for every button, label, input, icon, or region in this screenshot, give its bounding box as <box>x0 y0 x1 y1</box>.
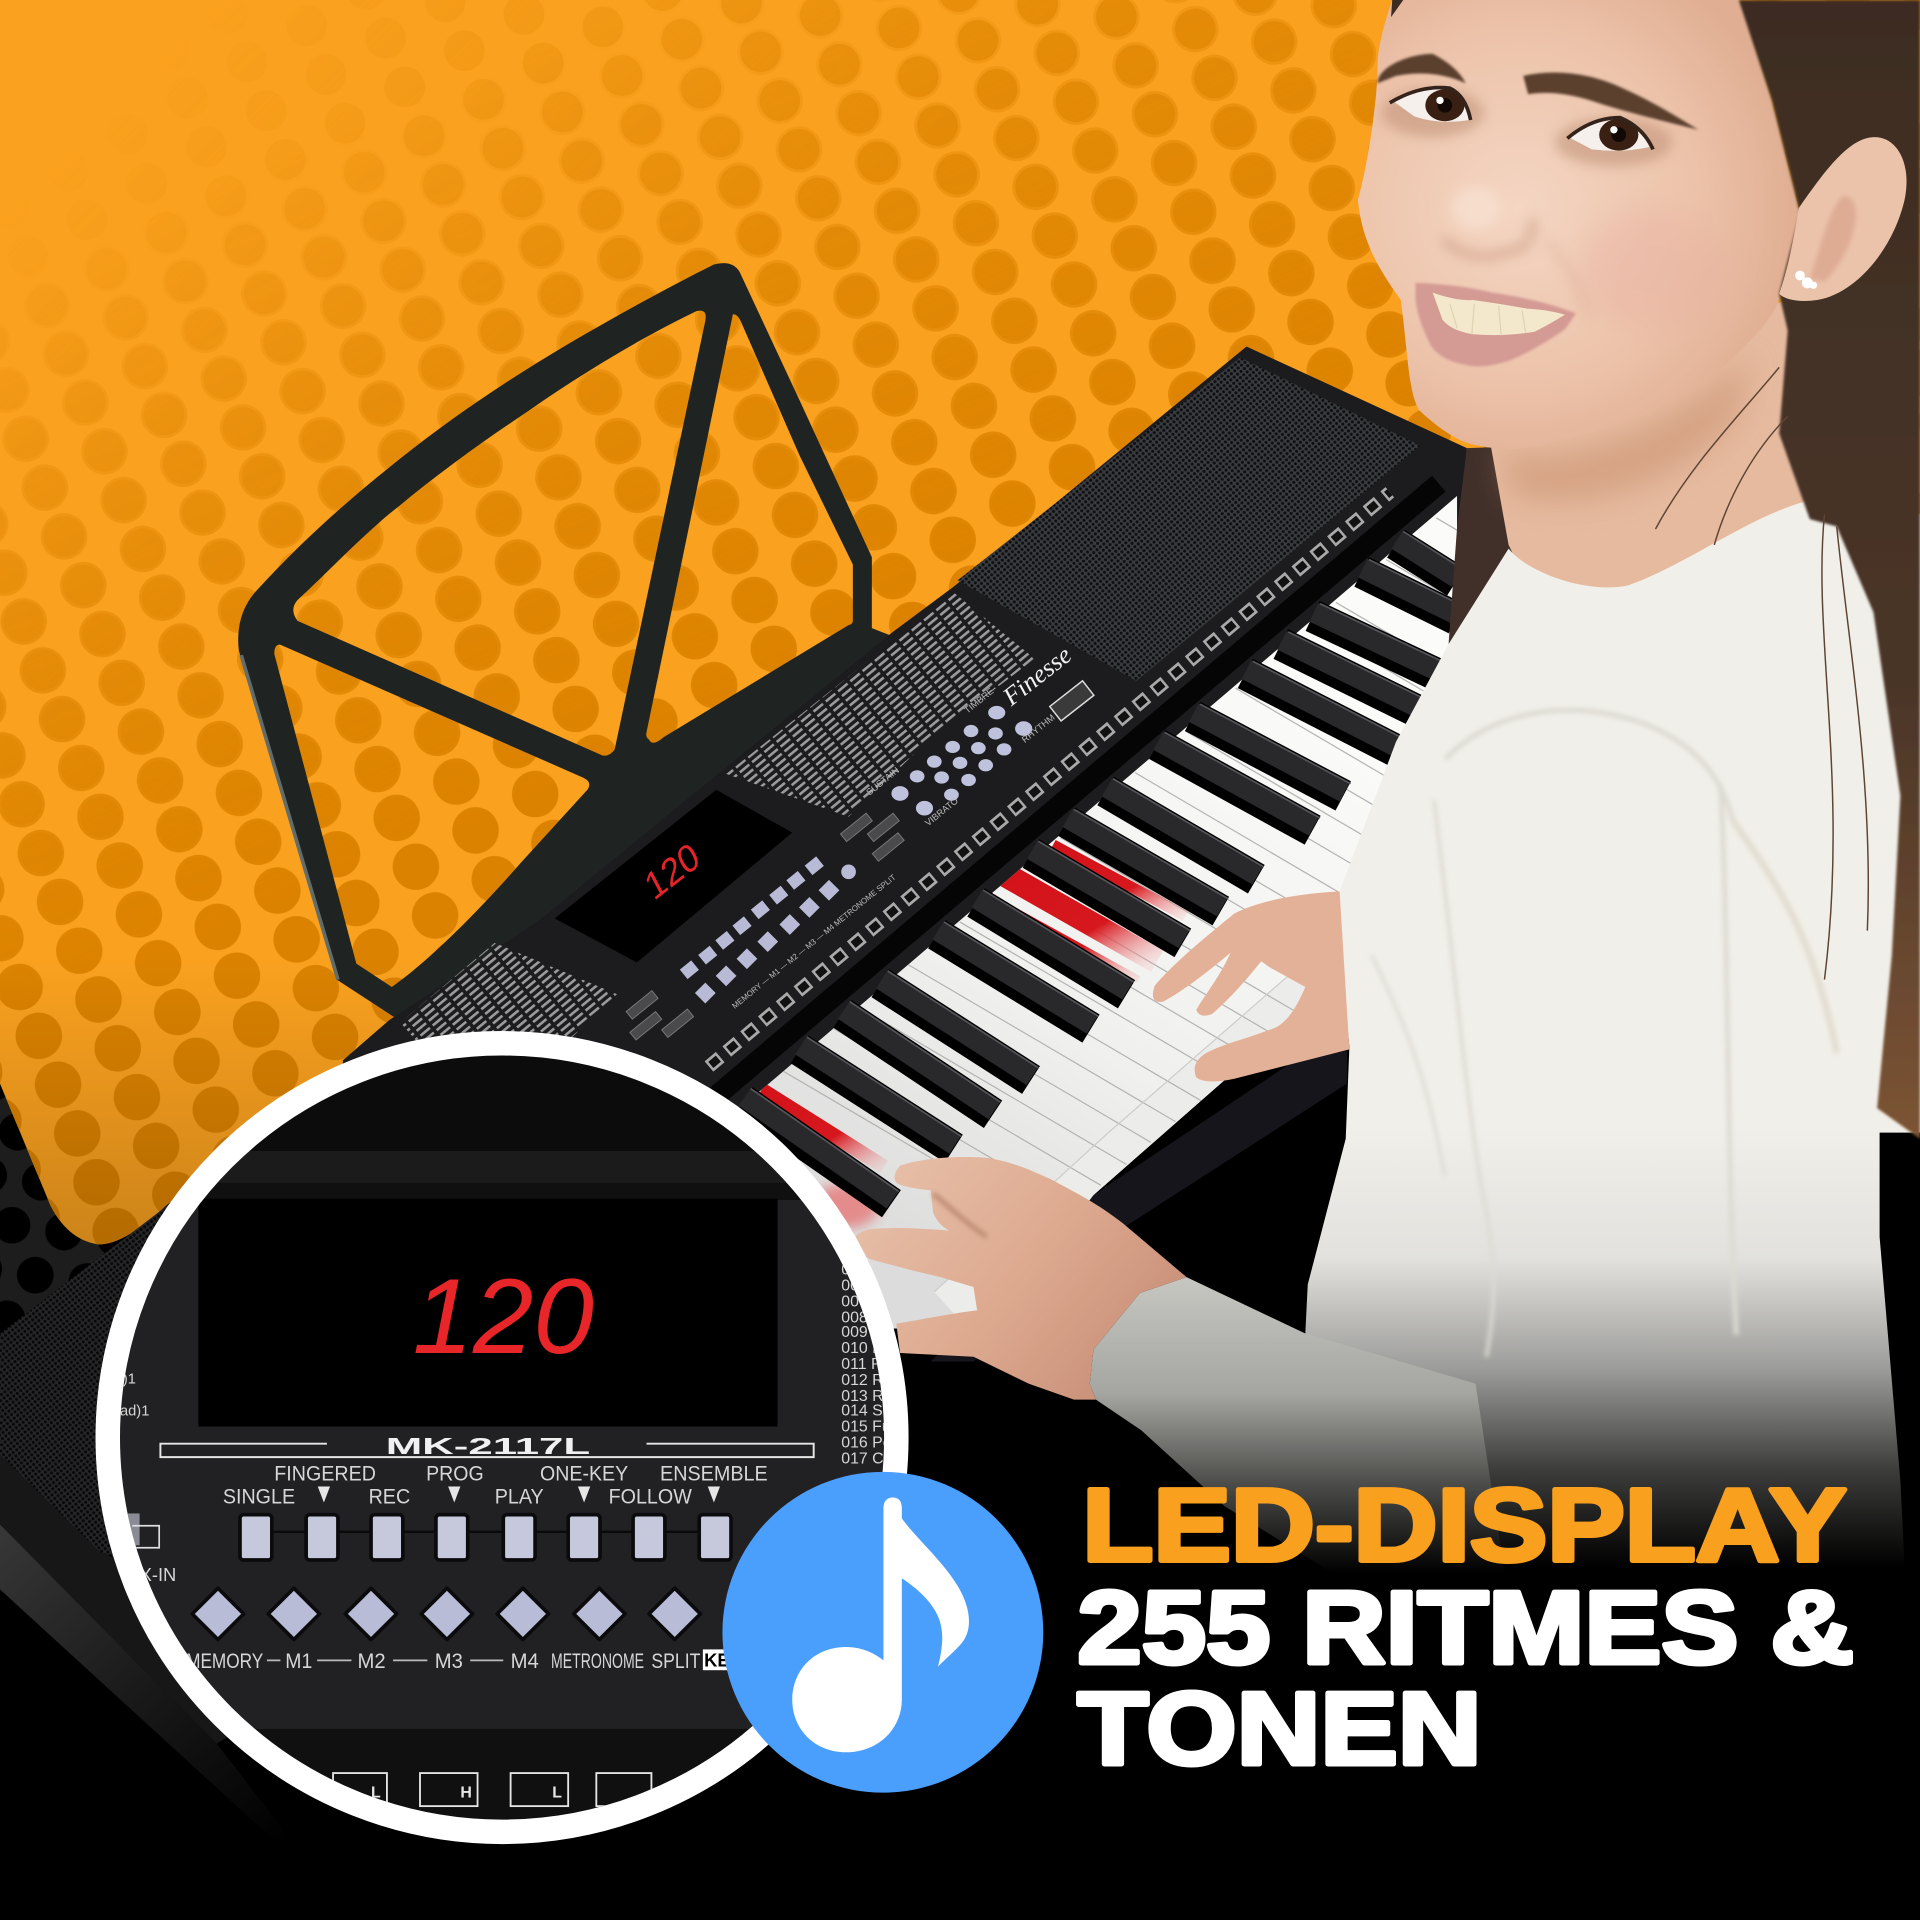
left clipped labels: AUX-IN <box>114 1564 176 1585</box>
icon: blue music note badge <box>722 1472 1043 1793</box>
ear <box>1779 137 1907 301</box>
diamond memory buttons <box>192 1588 700 1640</box>
upper hand <box>1153 891 1349 1082</box>
piano keys <box>726 496 1458 1329</box>
model bracket <box>160 1444 814 1457</box>
left clipped labels: (Pad)1 <box>92 1372 136 1388</box>
middle band <box>754 1151 787 1183</box>
key glow <box>811 1184 879 1228</box>
ear inner shadow <box>1810 196 1856 282</box>
keyboard: body and panel <box>343 347 1467 1237</box>
printed rhythm list blocks <box>400 943 617 1041</box>
memory labels: MEMORY <box>186 1650 263 1673</box>
bottom divider band <box>256 1729 748 1820</box>
KEY badge: KEY <box>704 1650 742 1671</box>
function labels: ONE-KEY <box>540 1462 628 1485</box>
right clipped tone list: 017 Club <box>841 1450 905 1467</box>
panel labels: RHYTHM <box>1020 712 1057 745</box>
function labels: FOLLOW <box>609 1486 692 1509</box>
function labels: PLAY <box>495 1486 544 1509</box>
memory labels: M2 <box>358 1650 386 1673</box>
instrument icon strip <box>709 492 1390 1067</box>
zoom circle: LED display close-up <box>92 1041 913 1839</box>
white key separators <box>784 518 1457 1186</box>
left slider button <box>122 1513 140 1545</box>
panel labels: MEMORY — M1 — M2 — M3 — M4 METRONOME SPLIT <box>730 873 898 1011</box>
memory labels: SPLIT <box>651 1650 701 1673</box>
circle content <box>120 1056 884 1820</box>
right clipped tone list: 008 Piano <box>841 1309 913 1326</box>
Finesse logo: Finesse <box>996 640 1077 712</box>
neck shadow <box>1500 355 1751 502</box>
sweater body <box>1305 500 1920 1580</box>
bottom icon letters: L <box>552 1785 562 1802</box>
bottom icon letters <box>372 1786 562 1798</box>
background: orange halftone panel <box>0 0 1920 1347</box>
nose shadow <box>1442 218 1533 256</box>
right clipped tone list: 010 Rock <box>841 1340 908 1357</box>
black keys shadow <box>743 544 1456 1204</box>
music note glyph <box>792 1498 969 1752</box>
hair behind neck <box>1449 447 1518 644</box>
white keys <box>726 496 1458 1329</box>
memory labels: M4 <box>511 1650 539 1673</box>
lower band above screen <box>204 1183 801 1200</box>
left bracket <box>132 1526 159 1548</box>
top dark band <box>250 1056 754 1151</box>
heading line 1: LED-DISPLAY <box>1082 1468 1847 1583</box>
function labels: ENSEMBLE <box>660 1462 768 1485</box>
hair sliver at temple <box>1391 0 1403 17</box>
function labels: REC <box>369 1486 410 1509</box>
left clipped labels <box>120 1374 175 1581</box>
panel labels: TIMBRE <box>962 686 996 715</box>
black keys sheen <box>751 531 1463 1191</box>
front rail of keyboard <box>931 1051 1347 1362</box>
slider switches <box>626 813 904 1040</box>
lip line <box>934 967 1298 1292</box>
eye sockets shadow <box>1381 88 1673 167</box>
logo badge <box>1050 681 1094 721</box>
cheek blush <box>1580 208 1727 331</box>
right eye <box>1567 118 1653 151</box>
label connector lines <box>267 1659 503 1661</box>
lower-left speaker grille of keyboard <box>0 1202 367 1641</box>
bottom icon letters: L <box>371 1785 381 1802</box>
right clipped tone list: 016 Pop <box>841 1434 901 1451</box>
function labels: FINGERED <box>274 1462 376 1485</box>
finger crease <box>933 1194 987 1237</box>
function buttons <box>240 1515 731 1560</box>
speaker grille <box>958 358 1420 681</box>
nose highlight <box>1451 186 1500 230</box>
memory labels <box>188 1654 700 1668</box>
function labels: PROG <box>426 1462 484 1485</box>
memory labels: M3 <box>435 1650 463 1673</box>
arrow markers <box>318 1487 720 1502</box>
hair <box>1739 0 1920 1139</box>
right clipped tone list: 009 Piano <box>841 1324 913 1341</box>
left eyebrow <box>1378 54 1466 83</box>
lower-left keyboard edge highlight <box>0 1524 333 1894</box>
memory labels: METRONOME <box>551 1650 644 1673</box>
heading line 3: TONEN <box>1078 1671 1482 1786</box>
right clipped tone list: 006 Piano <box>841 1278 913 1295</box>
function labels: SINGLE <box>223 1486 295 1509</box>
function labels <box>224 1466 767 1504</box>
teeth <box>1433 293 1565 335</box>
earring <box>1795 271 1817 289</box>
connector lines between buttons <box>256 1531 715 1533</box>
right clipped tone list: 007 Piano <box>841 1294 913 1311</box>
hair strands <box>1656 367 1868 980</box>
face <box>1358 0 1800 449</box>
white circle ring <box>108 1043 896 1832</box>
memory labels: M1 <box>285 1650 312 1673</box>
right clipped tone list: 011 Rock <box>841 1356 907 1373</box>
KEY badge <box>702 1649 727 1670</box>
music stand <box>238 263 894 1022</box>
lit red keys <box>762 845 1185 1167</box>
right clipped tone list <box>841 1262 913 1467</box>
bottom icon letters: H <box>460 1785 472 1802</box>
keyboard top panel <box>343 347 1467 1237</box>
left eye <box>1390 88 1471 122</box>
numeric rhythm and tone buttons <box>891 706 1032 816</box>
girl <box>853 0 1920 1582</box>
mouth lips <box>1416 283 1576 367</box>
lower hand <box>853 1157 1187 1400</box>
heading line 2: 255 RITMES & <box>1078 1570 1854 1685</box>
printed tone list blocks <box>726 593 1035 817</box>
left clipped labels: (Pad)1 <box>105 1404 149 1420</box>
background: dark dotted corner <box>0 1065 208 1359</box>
right clipped tone list: 012 Rock <box>841 1372 908 1389</box>
bottom icon boxes <box>333 1773 651 1806</box>
smile crease <box>1545 239 1589 316</box>
lower-left keyboard body <box>0 1455 367 1744</box>
panel labels <box>730 686 1057 1011</box>
right eyebrow <box>1523 73 1698 130</box>
display screen <box>198 1199 778 1427</box>
small LED screen <box>555 790 792 962</box>
right clipped tone list: 013 Rock <box>841 1388 908 1405</box>
panel labels: VIBRATO <box>923 796 960 828</box>
sweater folds <box>1371 710 1837 1357</box>
right clipped tone list: 015 Funk <box>841 1418 908 1435</box>
right clipped tone list: 005 Piano <box>841 1262 913 1279</box>
panel labels: SUSTAIN <box>864 765 901 797</box>
tooth lines <box>1450 304 1526 336</box>
model name: MK-2117L <box>386 1433 590 1459</box>
key front lip <box>934 1080 1224 1314</box>
mini function buttons <box>680 856 856 1003</box>
key bed shadow <box>716 484 1439 1096</box>
black keys top <box>744 540 1457 1200</box>
LED readout 120: 120 <box>413 1257 594 1376</box>
right clipped tone list: 014 Soul <box>841 1403 904 1420</box>
neck <box>1488 294 1818 609</box>
forearm sleeve <box>1090 1277 1506 1582</box>
heading: LED-DISPLAY 255 RITMES & TONEN <box>1078 1468 1854 1786</box>
small LED readout: 120 <box>638 833 706 908</box>
